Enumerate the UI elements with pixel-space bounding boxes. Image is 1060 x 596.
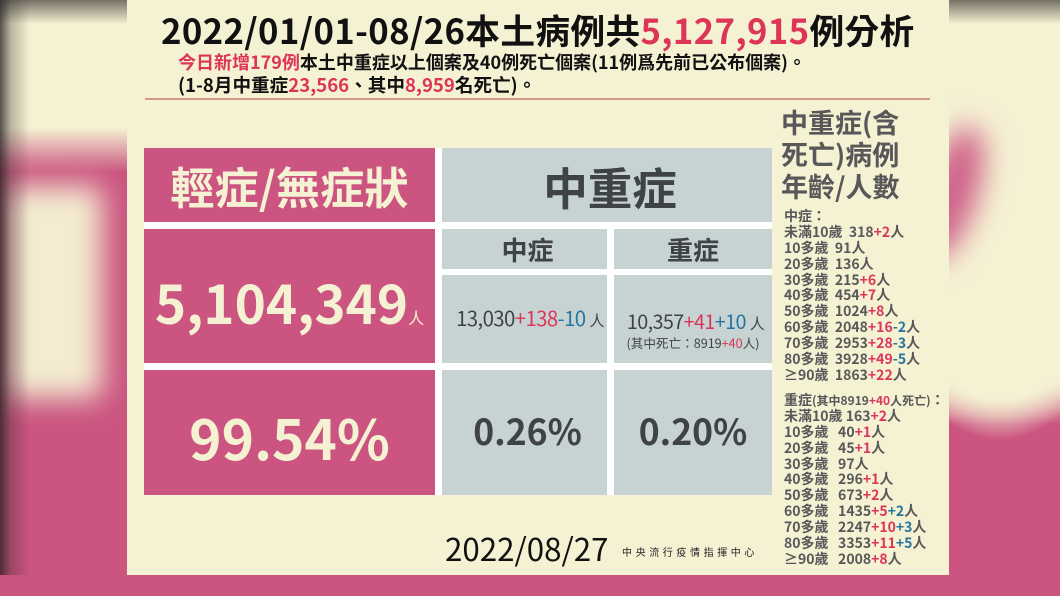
panel: severe count (614, 275, 772, 363)
panel: moderate percent (442, 370, 607, 495)
moderate age list: 中症： 未滿10歲 318+2人 10多歲 91人 20多歲 136人 30多歲 215+6人 40多歲 454+7人 50多歲 1024+8人 60多歲 2048+16-2人 70多歲 2953+28-3人 80多歲 3928+49-5人 ≥90歲 1863+22人 (784, 206, 920, 385)
severe age list: 重症(其中8919+40人死亡)： 未滿10歲 163+2人 10多歲 40+1人 20多歲 45+1人 30多歲 97人 40多歲 296+1人 50多歲 673+2人 60多歲 1435+5+2人 70多歲 2247+10+3人 80多歲 3353+11+5人 ≥90歲 2008+8人 (784, 390, 945, 569)
panel: mild percent: 99.54% (189, 396, 390, 476)
panel: moderate percent: 0.26% (473, 405, 582, 456)
panel: severe label (614, 229, 772, 269)
panel: moderate count (442, 275, 607, 363)
panel: severe percent: 0.20% (639, 405, 747, 456)
panel: mild count (144, 229, 435, 363)
subtitle line 2: (1-8月中重症23,566、其中8,959名死亡)。 (178, 71, 536, 98)
panel: moderate-severe heading (442, 148, 772, 222)
panel: severe label: 重症 (667, 231, 719, 268)
main cream panel (127, 0, 949, 575)
panel: mild heading: 輕症/無症狀 (170, 153, 409, 217)
severe death note: (其中死亡：8919+40人) (626, 333, 760, 352)
date: 2022/08/27 (445, 526, 608, 571)
panel: moderate label (442, 229, 607, 269)
subtitle line 1: 今日新增179例本土中重症以上個案及40例死亡個案(11例爲先前已公布個案)。 (178, 49, 806, 75)
source organisation: 中央流行疫情指揮中心 (622, 544, 758, 559)
data table (144, 148, 772, 495)
severe count number: 10,357+41+10 人 (627, 306, 764, 335)
panel: mild percent (144, 370, 435, 495)
panel: moderate label: 中症 (501, 231, 554, 268)
panel: moderate count: 13,030+138-10 人 (456, 302, 604, 332)
panel: mild count: 5,104,349人 (155, 264, 424, 340)
panel: severe percent (614, 370, 772, 495)
title: 2022/01/01-08/26本土病例共5,127,915例分析 (161, 4, 915, 54)
header divider (145, 98, 930, 100)
sidebar heading: 中重症(含 死亡)病例 年齡/人數 (781, 102, 899, 205)
panel: moderate-severe heading: 中重症 (543, 153, 677, 218)
